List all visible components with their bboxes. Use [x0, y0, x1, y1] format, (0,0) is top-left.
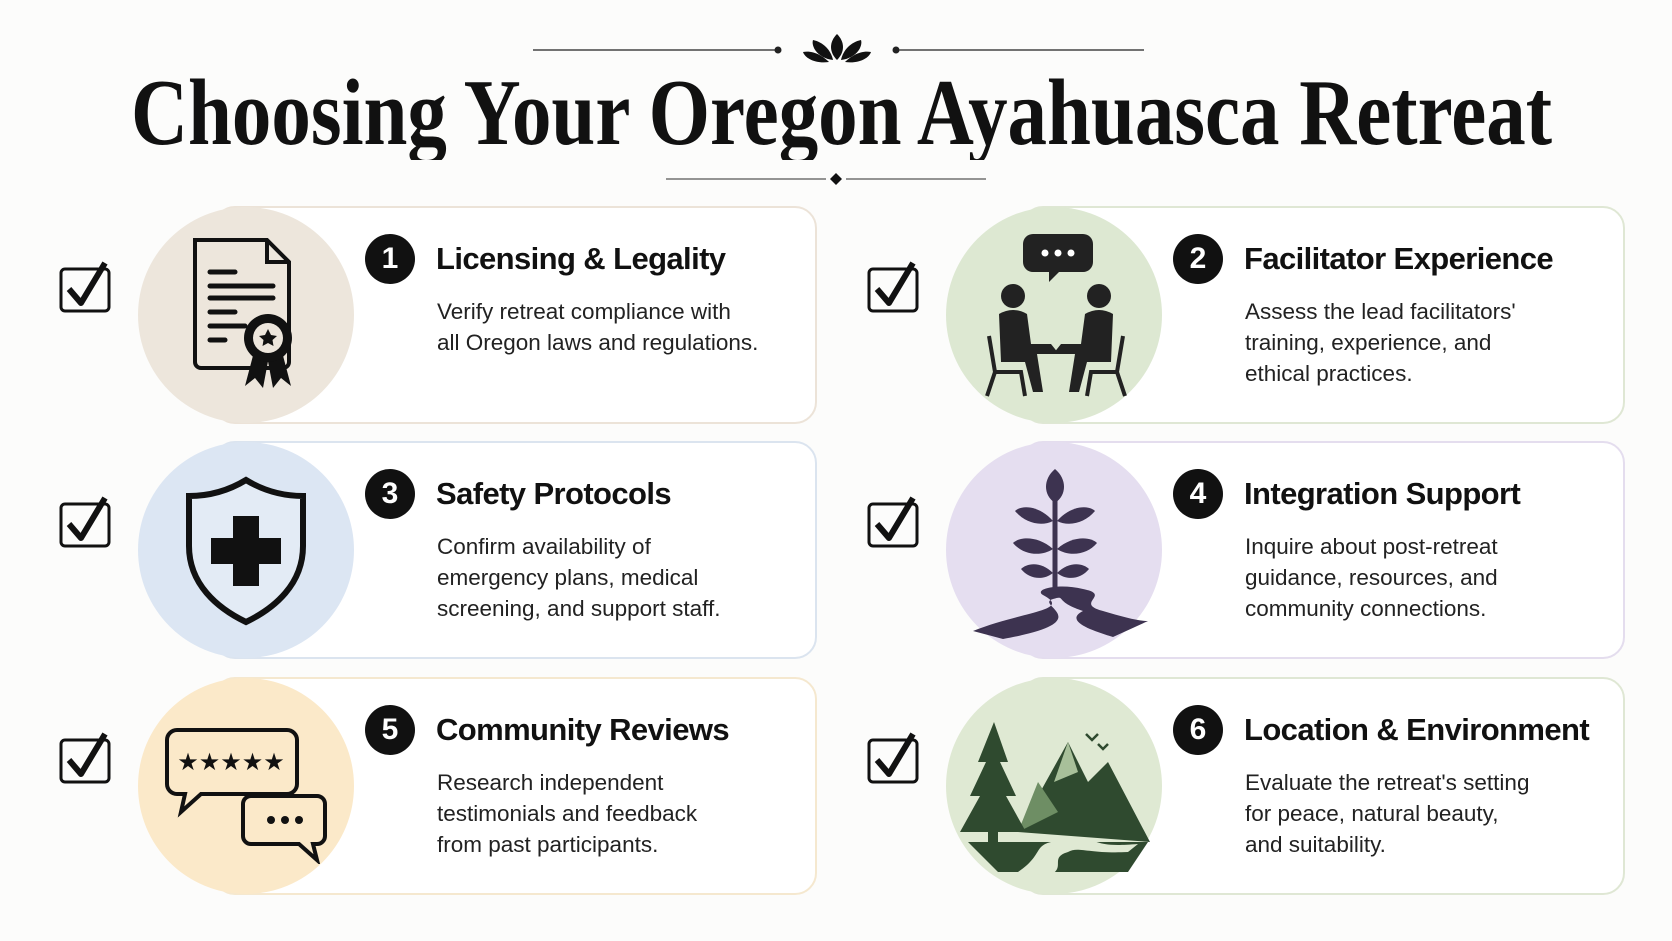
heading: Safety Protocols	[436, 476, 671, 511]
icon: checkbox	[60, 262, 110, 312]
panel: 5 reviews: 5	[382, 713, 398, 746]
icon: checkbox	[868, 496, 918, 548]
text: Evaluate the retreat's setting	[1245, 770, 1529, 795]
text: Confirm availability of	[437, 534, 651, 559]
heading: Facilitator Experience	[1244, 241, 1553, 276]
icon: review bubbles: ★★★★★	[177, 748, 285, 776]
panel: 6 location	[868, 677, 1625, 895]
text: for peace, natural beauty,	[1245, 801, 1498, 826]
text: Inquire about post-retreat	[1245, 534, 1498, 559]
panel: 4 integration	[868, 441, 1625, 659]
text: guidance, resources, and	[1245, 565, 1498, 590]
text	[1245, 770, 1529, 857]
heading: Community Reviews	[436, 712, 729, 747]
text	[437, 770, 698, 857]
icon: checkbox	[60, 496, 110, 548]
panel: 2 facilitator	[868, 206, 1625, 424]
text	[1245, 534, 1498, 621]
title underline ornament	[666, 173, 986, 185]
text: ethical practices.	[1245, 361, 1413, 386]
icon: certificate	[193, 238, 292, 388]
heading: Licensing & Legality	[436, 241, 725, 276]
icon: shield	[186, 476, 306, 626]
panel: 5 reviews	[60, 677, 817, 895]
text: Assess the lead facilitators'	[1245, 299, 1516, 324]
icon: plant and path	[973, 469, 1148, 639]
text: screening, and support staff.	[437, 596, 721, 621]
icon: checkbox	[868, 262, 918, 312]
panel: 2 facilitator: 2	[1190, 242, 1206, 275]
icon: checkbox	[868, 732, 918, 784]
text: Research independent	[437, 770, 663, 795]
text: from past participants.	[437, 832, 658, 857]
number badge	[365, 234, 415, 284]
heading: Location & Environment	[1244, 712, 1589, 747]
icon: mountains and trees	[960, 722, 1150, 872]
text	[1245, 299, 1516, 386]
text: all Oregon laws and regulations.	[437, 330, 758, 355]
text	[437, 299, 758, 355]
text: and suitability.	[1245, 832, 1386, 857]
text: emergency plans, medical	[437, 565, 698, 590]
panel: 3 safety: 3	[382, 477, 398, 510]
text	[437, 534, 721, 621]
text: Verify retreat compliance with	[437, 299, 731, 324]
panel: 1 licensing	[60, 206, 817, 424]
panel: 4 integration: 4	[1190, 477, 1206, 510]
text: testimonials and feedback	[437, 801, 697, 826]
icon: two people talking	[985, 234, 1127, 397]
icon: review bubbles	[165, 728, 327, 864]
heading: Integration Support	[1244, 476, 1520, 511]
text: training, experience, and	[1245, 330, 1491, 355]
panel: 6 location: 6	[1190, 713, 1206, 746]
number badge: 1	[382, 242, 398, 275]
header ornament	[533, 34, 1144, 62]
icon: checkbox	[60, 732, 110, 784]
text: community connections.	[1245, 596, 1486, 621]
panel: 3 safety	[60, 441, 817, 659]
